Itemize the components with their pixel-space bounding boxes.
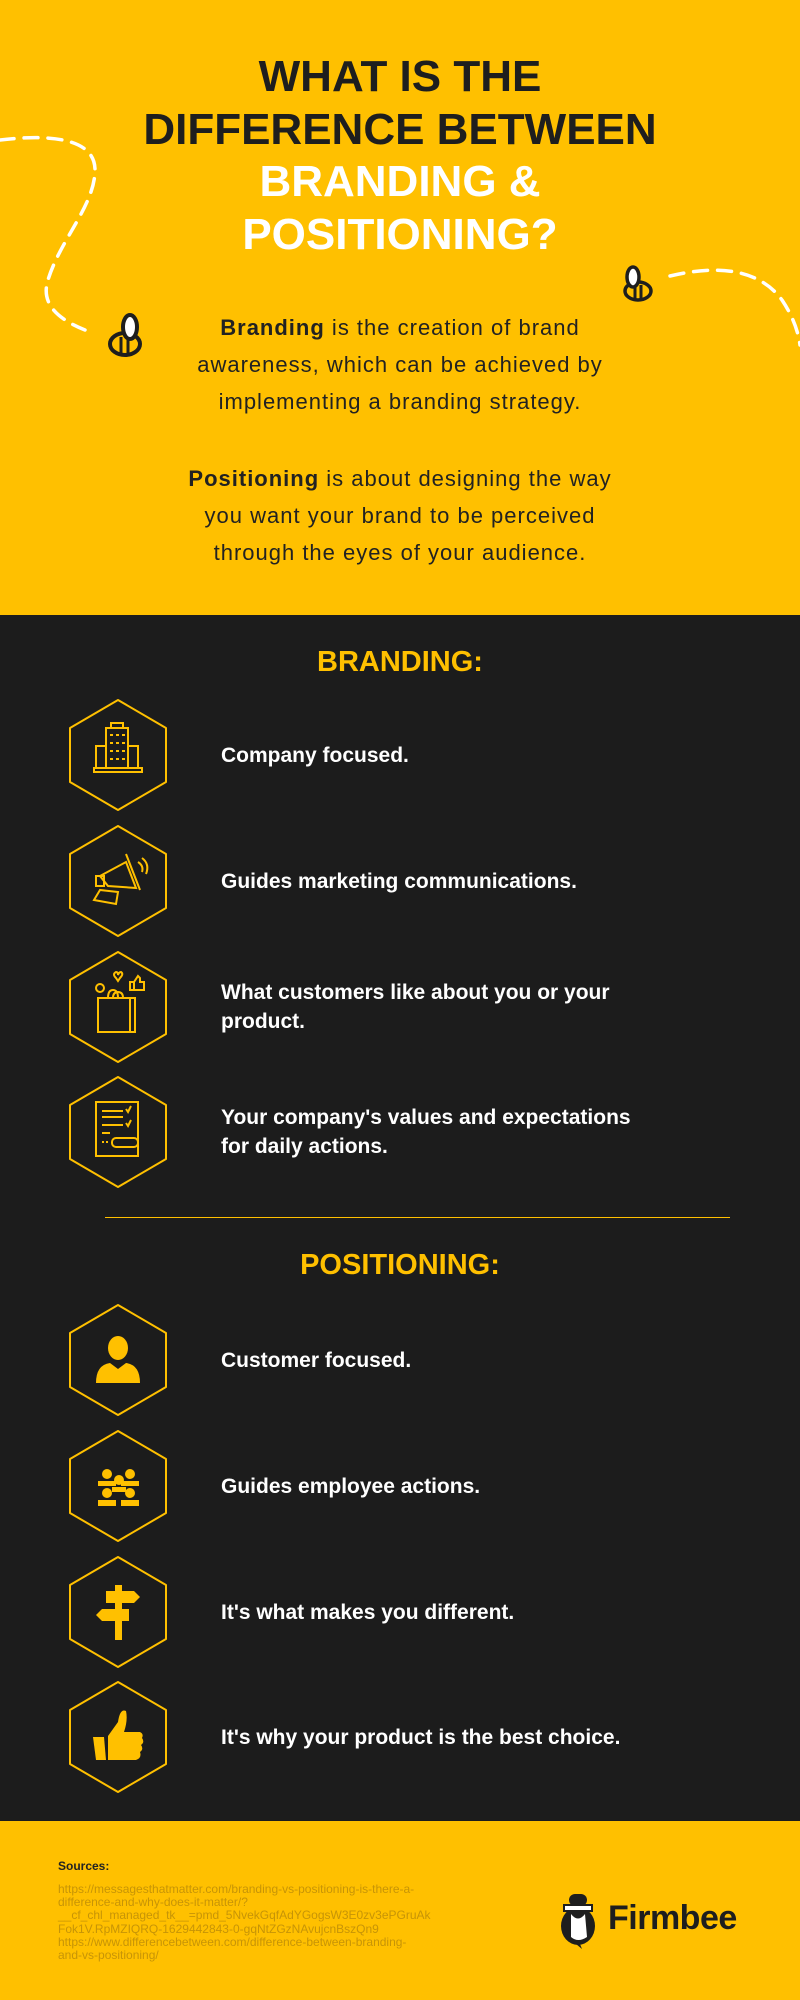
divider — [105, 1217, 730, 1218]
title: BRANDING & — [259, 157, 541, 206]
sources text: https://messagesthatmatter.com/branding-vs-positioning-is-there-a- — [58, 1882, 414, 1896]
title: DIFFERENCE BETWEEN — [143, 104, 657, 154]
text: positioning definition: you want your brand to be perceived — [205, 503, 595, 528]
sources text: Sources: — [58, 1859, 109, 1873]
heading: positioning: POSITIONING: — [300, 1249, 500, 1281]
sources text: difference-and-why-does-it-matter/? — [58, 1895, 248, 1909]
text: positioning definition: through the eyes of your audience. — [214, 540, 586, 565]
text: positioning definition — [188, 466, 612, 565]
row: customer focused: Customer focused. — [221, 1348, 411, 1372]
row: what customers like — [69, 951, 610, 1063]
row: different: It's what makes you different. — [221, 1600, 514, 1624]
sources text: and-vs-positioning/ — [58, 1948, 159, 1962]
row: guides employee — [69, 1430, 480, 1542]
row: best choice: It's why your product is the best choice. — [221, 1726, 620, 1748]
dashed paths — [0, 136, 800, 347]
row: company focused: Company focused. — [221, 744, 409, 766]
title: POSITIONING? — [242, 210, 558, 258]
text: branding definition: awareness, which can be achieved by — [197, 352, 603, 377]
text: branding definition: Branding is the creation of brand — [220, 315, 580, 340]
sources text: __cf_chl_managed_tk__=pmd_5NvekGqfAdYGogsW3E0zv3ePGruAk — [58, 1908, 431, 1922]
heading: branding: BRANDING: — [317, 646, 483, 678]
row: values — [69, 1076, 631, 1188]
row: different — [69, 1556, 514, 1668]
sources text: Fok1V.RpMZIQRQ-1629442843-0-gqNtZGzNAvujcnBszQn9 — [58, 1922, 379, 1936]
text: branding definition — [197, 315, 603, 414]
text: positioning definition: Positioning is about designing the way — [188, 466, 612, 491]
row: guides employee: Guides employee actions. — [221, 1474, 480, 1498]
icon: bee left — [108, 313, 142, 357]
sources text: https://www.differencebetween.com/difference-between-branding- — [58, 1935, 406, 1949]
sources text — [58, 1859, 431, 1962]
row: best choice — [69, 1681, 620, 1793]
header panel — [0, 0, 800, 615]
row: values: for daily actions. — [221, 1135, 388, 1158]
row: values: Your company's values and expectations — [221, 1106, 631, 1129]
logo: Firmbee: Firmbee — [608, 1899, 737, 1937]
row: guides marketing: Guides marketing communications. — [221, 870, 577, 892]
title: WHAT IS THE — [259, 52, 541, 101]
row: guides marketing — [69, 825, 577, 937]
row: what customers like: product. — [221, 1010, 305, 1033]
text: branding definition: implementing a branding strategy. — [219, 389, 581, 414]
row: what customers like: What customers like about you or your — [221, 981, 610, 1004]
row: company focused — [69, 699, 409, 811]
logo: Firmbee — [561, 1894, 737, 1949]
title — [143, 52, 657, 258]
row: customer focused — [69, 1304, 411, 1416]
icon: bee right — [623, 265, 653, 302]
footer panel — [0, 1821, 800, 2000]
